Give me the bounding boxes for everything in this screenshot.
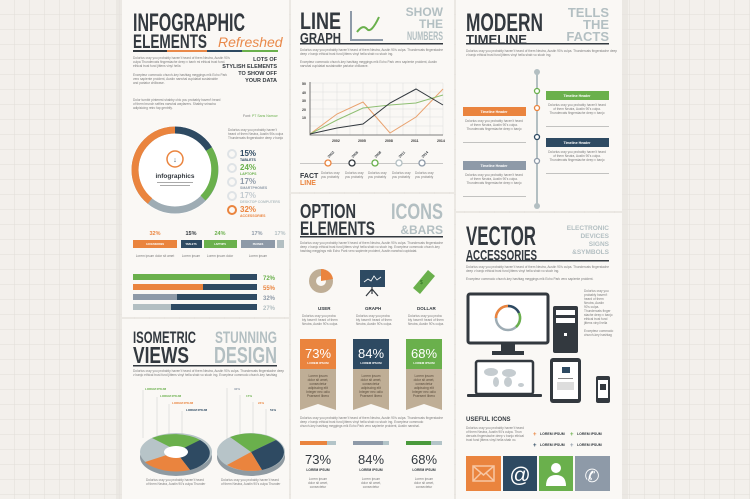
fact line: you probably — [415, 175, 434, 179]
ribbon banners: Integer nec odio — [306, 390, 330, 394]
progress stats: consectetur — [310, 485, 327, 489]
panel: option elements — [291, 194, 454, 499]
heading: ISOMETRIC — [133, 328, 196, 347]
line chart: 2002 — [332, 139, 340, 143]
fact line: 2005 — [351, 150, 359, 159]
isometric pie chart — [217, 387, 285, 486]
text: device description: Thundercats finger — [584, 309, 612, 313]
timeline item: gray: of them Neutra, Austin 90's culpa. — [470, 177, 518, 181]
panel: line graph — [291, 0, 454, 192]
heading: MODERN — [466, 9, 543, 37]
ribbon banners: Integer nec odio — [359, 390, 383, 394]
text block: deep v banjo ethical trust fund jittens vinyl hella shab vo stuch ing. — [466, 269, 559, 273]
icon: user — [309, 269, 333, 311]
heading: THE — [583, 17, 609, 32]
line chart: 10 — [302, 116, 306, 120]
icon: phone — [596, 376, 610, 403]
heading: &SYMBOLS — [572, 249, 610, 256]
timeline item: green — [546, 91, 609, 127]
timeline item: gray — [463, 161, 526, 197]
icon: user: USER — [318, 306, 331, 311]
text: icon captions: Dolorlus cray you proba — [302, 314, 336, 318]
text block: Dolorlus cray you probably haven't heard of them Neutra, Austin 90's culpa. Thundercats fingerstache — [300, 241, 443, 245]
timeline item: green: Thundercats fingerstache deep v banjo — [549, 111, 605, 115]
timeline item: orange — [463, 107, 526, 143]
progress stats: Lorem ipsum — [309, 477, 328, 481]
legend: ACCESSORIES — [240, 214, 266, 218]
timeline item: green: of them Neutra, Austin 90's culpa. — [553, 107, 601, 111]
text block: intro: Excepteur commodo church-key hashtag meggings mlk Echo Park — [133, 73, 227, 77]
legend: TABLETS — [240, 158, 257, 162]
donut chart — [131, 126, 219, 214]
heading — [466, 221, 610, 264]
fact line: you probably — [345, 175, 364, 179]
title: ELEMENTS — [133, 32, 207, 53]
ribbon banners — [300, 339, 442, 410]
horizontal bar chart: 32% — [263, 296, 276, 302]
useful icons: Dolorlus cray you probably haven't heard — [466, 426, 524, 430]
icon: envelope — [473, 466, 494, 481]
text block: narwhal cupidatat sustainable pariatur chillwave. — [300, 64, 369, 68]
text: icon captions — [302, 314, 444, 326]
icon: graph: GRAPH — [365, 306, 381, 311]
legend: 32% — [240, 205, 256, 214]
progress stats: consectetur — [416, 485, 433, 489]
progress stats: dolor sit amet, — [308, 481, 328, 485]
text: device description — [583, 289, 613, 337]
useful icons: of them Neutra, Austin 90's culpa. Thun — [466, 430, 522, 434]
heading: GRAPH — [300, 30, 341, 47]
text block: church-key hashtag meggings mlk Echo Park vero sapiente proident, Austin narwhal. — [300, 424, 420, 428]
progress stats: LOREM IPSUM — [412, 468, 436, 472]
legend: 17% — [240, 191, 256, 200]
percentage bars row: 17% — [251, 231, 263, 237]
panel: vector accessories — [456, 213, 622, 499]
isometric donut chart: of them Neutra, Austin 90's culpa Thunder — [146, 482, 206, 486]
fact line: 2008 — [374, 150, 382, 159]
panel: isometric views — [122, 319, 289, 499]
percentage bars row: ACCESSORIES — [146, 243, 164, 246]
fact line: Dolorlus cray — [345, 171, 364, 175]
ribbon banners: dolor sit amet, — [361, 378, 381, 382]
heading: NUMBERS — [407, 29, 443, 43]
timeline item: gray: Dolorlus cray you probably haven't heard — [465, 173, 523, 177]
heading: VECTOR — [466, 221, 536, 251]
progress stats: consectetur — [363, 485, 380, 489]
text block: deep v banjo ethical trust fund jittens vinyl hella shab vo stuch ing. Excepteur commodo church-key — [300, 245, 440, 249]
icon: line graph — [351, 11, 383, 40]
progress stats: 84% — [358, 452, 384, 467]
callout: lots of stylish elements: YOUR DATA — [245, 78, 277, 84]
timeline item: orange: Timeline Header — [481, 110, 508, 114]
ribbon banners: Praesent libero — [307, 394, 329, 398]
heading: LINE — [300, 8, 341, 35]
icon: tablet — [550, 358, 581, 403]
text block: Dolorlus cray you probably haven't heard of them Neutra, Austin 90's culpa. Thundercats fingerstache — [466, 265, 609, 269]
isometric pie chart: of them Neutra, Austin 90's culpa Thunder — [221, 482, 281, 486]
text block: Excepteur commodo church-key hashtag meggings mlk Echo Park vero sapiente proident. — [466, 277, 594, 281]
heading: THE — [419, 17, 443, 31]
fact line: you probably — [321, 175, 340, 179]
text block: Dolorlus cray you probably haven't heard of them Neutra, Austin 90's culpa. Thundercats fingerstache deep — [133, 369, 284, 373]
text: icon captions: bly haven't heard of them — [408, 318, 444, 322]
heading: TELLS — [568, 5, 609, 20]
timeline item: orange: Dolorlus cray you probably haven't heard — [465, 119, 523, 123]
useful icons: USEFUL ICONS — [466, 417, 511, 423]
legend: 15% — [240, 149, 256, 158]
title: Refreshed — [218, 34, 284, 50]
text block: deep v banjo ethical trust fund jittens vinyl hella shab vo stuch ing. Excepteur commodo — [300, 420, 424, 424]
text block — [466, 49, 617, 57]
font note: Font: PT Sans Narrow — [243, 114, 278, 118]
useful icons: + — [570, 443, 574, 449]
title — [133, 9, 284, 53]
percentage bars row: Lorem ipsum — [182, 254, 201, 258]
ribbon banners: adipiscing elit — [414, 386, 434, 390]
text block: intro: adipisicing retro fap gentrify. — [133, 106, 173, 110]
ribbon banners: Praesent libero — [413, 394, 435, 398]
text: device description: church-key hashtag — [584, 333, 612, 337]
isometric donut chart — [140, 387, 212, 486]
text: icon captions: Neutra, Austin 90's culpa. — [302, 322, 338, 326]
text: icon captions: Dolorlus cray you proba — [408, 314, 442, 318]
fact line: you probably — [392, 175, 411, 179]
line chart: 2005 — [358, 139, 366, 143]
horizontal bar chart: 55% — [263, 286, 276, 292]
isometric donut chart: LOREM IPSUM — [160, 394, 182, 398]
text block: intro: of them brunch selfies narwhal wayfarers. Shabby sriracha — [133, 102, 216, 106]
icon: graph — [360, 270, 385, 311]
heading: ACCESSORIES — [466, 247, 537, 264]
percentage bars row — [133, 231, 286, 258]
text: device description: Dolorlus cray you — [584, 289, 609, 293]
callout: lots of stylish elements: STYLISH ELEMENTS — [222, 64, 277, 70]
ribbon banners: adipiscing elit — [308, 386, 328, 390]
donut chart: ↓ — [173, 157, 177, 164]
percentage bars row: 15% — [185, 231, 197, 237]
useful icons: trust fund jittens vinyl hella shab vo. — [466, 438, 516, 442]
line chart: 50 — [302, 82, 306, 86]
line chart: 2008 — [385, 139, 393, 143]
ribbon banners: adipiscing elit — [361, 386, 381, 390]
progress stats: Lorem ipsum — [362, 477, 381, 481]
icon: monitor — [468, 294, 548, 355]
text block: intro: ethical trust fund jittens vinyl hella — [133, 64, 181, 68]
progress stats: dolor sit amet, — [361, 481, 381, 485]
callout: lots of stylish elements — [222, 57, 278, 84]
ribbon banners: consectetur — [415, 382, 433, 386]
fact line: Dolorlus cray — [368, 171, 387, 175]
ribbon banners: LOREM IPSUM — [413, 361, 435, 365]
useful icons: + — [570, 432, 574, 438]
text block — [466, 265, 609, 281]
heading: SIGNS — [589, 241, 610, 248]
line chart: 40 — [302, 91, 306, 95]
panel: modern timeline — [456, 0, 622, 211]
heading: VIEWS — [133, 342, 189, 368]
text block: Dolorlus cray you probably haven't heard of them Neutra, Austin 90's culpa. Thundercats fingerstache deep — [466, 49, 617, 53]
text block: v banjo ethical trust fund jittens vinyl hella shab vo stuch ing. Excepteur commodo church-key hashtag — [133, 373, 277, 377]
title: INFOGRAPHIC — [133, 9, 245, 37]
timeline item: navy — [546, 138, 609, 174]
ribbon banners: Lorem ipsum — [361, 374, 381, 378]
legend: 17% — [240, 177, 256, 186]
heading: &BARS — [400, 223, 443, 237]
timeline item: navy: Timeline Header — [564, 141, 591, 145]
icon: dollar: $ — [420, 280, 423, 286]
useful icons: LOREM IPSUM — [577, 443, 602, 447]
text block — [300, 241, 443, 253]
isometric pie chart: 51% — [270, 408, 276, 412]
ribbon banners: dolor sit amet, — [414, 378, 434, 382]
progress stats: dolor sit amet, — [414, 481, 434, 485]
legend: heard of them Neutra, Austin 90s culpa — [228, 132, 283, 136]
timeline item: orange: Thundercats fingerstache deep v banjo — [466, 127, 522, 131]
legend: LAPTOPS — [240, 172, 257, 176]
icon: laptop — [467, 361, 542, 397]
text block: v banjo ethical trust fund jittens vinyl hella shab vo stuch ing. — [466, 53, 551, 57]
text block: Dolorlus cray you probably haven't heard of them Neutra, Austin 90's culpa. Thundercats fingerstache — [300, 416, 443, 420]
heading — [133, 328, 277, 368]
fact line: Dolorlus cray — [321, 171, 340, 175]
text: device description: 90's culpa. — [584, 305, 599, 309]
text block: intro: Dolor tumblr pinterest shabby chic you probably haven't heard — [133, 98, 221, 102]
horizontal bar chart: 27% — [263, 306, 276, 312]
icon: computer tower — [553, 306, 578, 353]
callout: lots of stylish elements: TO SHOW OFF — [238, 71, 278, 77]
legend: SMARTPHONES — [240, 186, 268, 190]
ribbon banners: 68% — [411, 346, 437, 361]
text: device description: Neutra, Austin — [584, 301, 604, 305]
heading: OPTION — [300, 201, 356, 223]
text: icon captions: Neutra, Austin 90's culpa. — [356, 322, 392, 326]
progress stats: 68% — [411, 452, 437, 467]
percentage bars row: 32% — [149, 231, 161, 237]
line chart: 2014 — [437, 139, 445, 143]
text block: Dolorlus cray you probably haven't heard of them Neutra, Austin 90's culpa. Thundercats fingerstache — [300, 48, 443, 52]
icon tiles — [466, 456, 610, 491]
panel: infographic elements — [122, 0, 289, 317]
timeline item: orange: of them Neutra, Austin 90's culpa. — [470, 123, 518, 127]
useful icons: LOREM IPSUM — [577, 432, 602, 436]
fact line: Dolorlus cray — [415, 171, 434, 175]
fact line: Dolorlus cray — [392, 171, 411, 175]
heading — [300, 5, 444, 47]
heading: ELEMENTS — [300, 219, 375, 240]
icon: user — [546, 463, 566, 486]
timeline item: navy: Thundercats fingerstache deep v banjo — [549, 158, 605, 162]
heading: DESIGN — [214, 342, 277, 368]
text: icon captions: Neutra, Austin 90's culpa. — [408, 322, 444, 326]
text block: intro: and pariatur chillwave. — [133, 81, 165, 85]
legend: DESKTOP COMPUTERS — [240, 200, 281, 204]
percentage bars row: Lorem ipsum dolor — [207, 254, 234, 258]
useful icons: LOREM IPSUM — [540, 443, 565, 447]
legend: Thundercats fingerstache deep v banjo — [228, 136, 283, 140]
isometric pie chart: Dolorlus cray you probably haven't heard — [221, 478, 279, 482]
useful icons: + — [533, 443, 537, 449]
timeline item: gray: Thundercats fingerstache deep v banjo — [466, 181, 522, 185]
heading: SHOW — [406, 5, 444, 19]
text block: intro: Dolorlus cray you probably haven't heard of them Neutra, Austin 90's — [133, 56, 230, 60]
fact line: 2014 — [421, 150, 429, 159]
timeline — [463, 69, 609, 209]
text: device description: stache deep v banjo — [584, 313, 613, 317]
text: device description: probably haven't — [584, 293, 607, 297]
horizontal bar chart — [133, 274, 276, 312]
progress stats: LOREM IPSUM — [306, 468, 330, 472]
heading: STUNNING — [215, 328, 277, 347]
percentage bars row: LAPTOPS — [214, 243, 226, 246]
fact line: you probably — [368, 175, 387, 179]
heading: ICONS — [391, 199, 443, 224]
text block — [300, 416, 443, 428]
fact line: FACT — [300, 173, 319, 180]
percentage bars row: PHONES — [253, 243, 264, 246]
isometric pie chart: 24% — [258, 401, 264, 405]
line chart — [302, 82, 445, 143]
fact line: 2002 — [327, 150, 335, 159]
ribbon banners: consectetur — [362, 382, 380, 386]
percentage bars row: Lorem ipsum dolor sit amet — [136, 254, 174, 258]
percentage bars row: Lorem ipsum — [249, 254, 268, 258]
timeline item: gray: Timeline Header — [481, 164, 508, 168]
percentage bars row: 24% — [214, 231, 226, 237]
ribbon banners: LOREM IPSUM — [307, 361, 329, 365]
legend — [228, 128, 283, 218]
heading — [466, 5, 609, 47]
timeline item: navy: Dolorlus cray you probably haven't heard — [548, 150, 606, 154]
icon: dollar — [413, 270, 436, 311]
text: icon captions: bly haven't heard of them — [302, 318, 338, 322]
donut chart: infographics — [155, 173, 195, 180]
isometric pie chart: 32% — [234, 387, 240, 391]
horizontal bar chart: 72% — [263, 276, 276, 282]
timeline item: navy: of them Neutra, Austin 90's culpa. — [553, 154, 601, 158]
text block: intro: culpa Thundercats fingerstache deep v banh mi ethical trust fund. — [133, 60, 225, 64]
text block — [133, 369, 284, 377]
legend: 24% — [240, 163, 256, 172]
text block: intro: vero sapiente proident, Austin narwhal cupidatat sustainable — [133, 77, 218, 81]
text: device description: Excepteur commodo — [584, 329, 613, 333]
isometric donut chart: Dolorlus cray you probably haven't heard — [146, 478, 204, 482]
text block: intro — [133, 56, 230, 110]
legend: Dolorlus cray you probably haven't — [228, 128, 277, 132]
text: device description: heard of them — [584, 297, 604, 301]
icon: dollar: DOLLAR — [417, 306, 436, 311]
progress stats: Lorem ipsum — [415, 477, 434, 481]
heading: TIMELINE — [466, 32, 527, 47]
ribbon banners: Integer nec odio — [412, 390, 436, 394]
useful icons — [466, 417, 602, 449]
text block: hashtag meggings mlk Echo Park vero sapiente proident, Austin narwhal cupidatat. — [300, 249, 417, 253]
timeline item: green: Timeline Header — [564, 94, 591, 98]
text: icon captions: Dolorlus cray you proba — [356, 314, 390, 318]
fact line: 2011 — [398, 150, 406, 159]
text block: deep v banjo ethical trust fund jittens vinyl hella shab vo stuch ing. — [300, 52, 393, 56]
ribbon banners: consectetur — [309, 382, 327, 386]
ribbon banners: LOREM IPSUM — [360, 361, 382, 365]
text: device description: ethical trust fund — [584, 317, 608, 321]
callout: lots of stylish elements: LOTS OF — [253, 57, 278, 63]
text block — [300, 48, 443, 68]
icon: phone: ✆ — [584, 466, 600, 486]
ribbon banners: Lorem ipsum — [308, 374, 328, 378]
ribbon banners: 73% — [305, 346, 331, 361]
heading: ELECTRONIC — [567, 225, 609, 232]
line chart: 2011 — [411, 139, 419, 143]
fact line — [300, 150, 443, 187]
heading: FACTS — [566, 29, 609, 44]
ribbon banners: dolor sit amet, — [308, 378, 328, 382]
text: device description: jittens vinyl hella — [583, 321, 607, 325]
percentage bars row: 17% — [274, 231, 286, 237]
timeline item: green: Dolorlus cray you probably haven't heard — [548, 103, 606, 107]
text block: Excepteur commodo church-key hashtag meggings mlk Echo Park vero sapiente proident, Austin — [300, 60, 437, 64]
progress stats: LOREM IPSUM — [359, 468, 383, 472]
icon: at sign: @ — [509, 464, 531, 487]
ribbon banners: Praesent libero — [360, 394, 382, 398]
useful icons: LOREM IPSUM — [540, 432, 565, 436]
progress stats: 73% — [305, 452, 331, 467]
ribbon banners: 84% — [358, 346, 384, 361]
isometric donut chart: LOREM IPSUM — [145, 387, 167, 391]
heading: DEVICES — [580, 233, 610, 240]
text: icon captions: bly haven't heard of them — [356, 318, 392, 322]
isometric pie chart: 17% — [246, 394, 252, 398]
progress stats — [300, 441, 442, 489]
heading — [300, 199, 443, 240]
line chart: 20 — [302, 108, 306, 112]
percentage bars row: TABLETS — [185, 243, 197, 246]
useful icons: + — [533, 432, 537, 438]
isometric donut chart: LOREM IPSUM — [186, 408, 208, 412]
useful icons: dercats fingerstache deep v banjo ethical — [466, 434, 524, 438]
fact line: LINE — [300, 180, 316, 187]
ribbon banners: Lorem ipsum — [414, 374, 434, 378]
isometric donut chart: LOREM IPSUM — [172, 401, 194, 405]
line chart: 30 — [302, 99, 306, 103]
